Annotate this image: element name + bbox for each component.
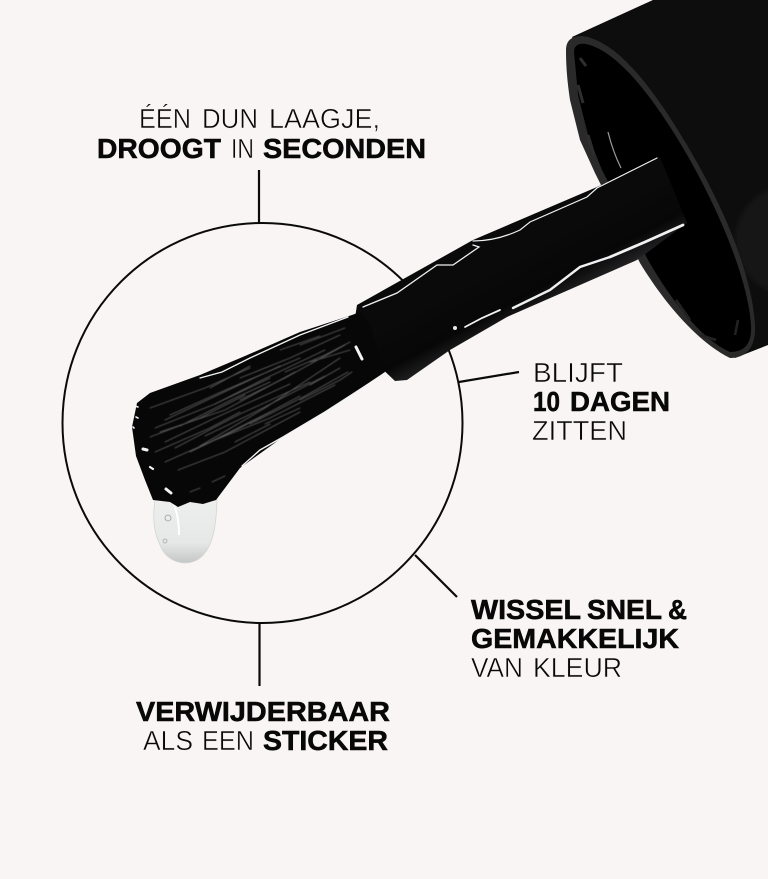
brush body bbox=[132, 312, 385, 507]
circle outline bbox=[62, 223, 462, 623]
label: lower right: VAN bbox=[471, 652, 523, 683]
label: right: 10 bbox=[533, 386, 560, 417]
label: right: DAGEN bbox=[570, 386, 670, 417]
connector: right label bbox=[459, 372, 519, 382]
connector: bottom label bbox=[258, 624, 261, 686]
label: top: LAAGJE, bbox=[269, 103, 380, 134]
label: top: DROOGT bbox=[97, 133, 221, 164]
brush with polish drop bbox=[132, 312, 385, 563]
stem body bbox=[355, 157, 687, 381]
nail polish cap bbox=[566, 0, 768, 358]
label: top: SECONDEN bbox=[263, 133, 426, 164]
polish bottle stem bbox=[355, 157, 687, 381]
label: lower right bbox=[471, 594, 687, 683]
label: top: IN bbox=[231, 133, 254, 164]
bristle strands bbox=[150, 328, 352, 492]
label: lower right: & bbox=[668, 594, 687, 625]
clear drop bbox=[154, 495, 217, 563]
cap opening interior bbox=[574, 44, 751, 352]
cap opening rim bbox=[566, 36, 755, 358]
label: bottom: ALS bbox=[143, 725, 193, 756]
label: right bbox=[532, 357, 670, 446]
label: right: ZITTEN bbox=[532, 415, 627, 446]
connector: top label bbox=[258, 170, 260, 223]
label: top: DUN bbox=[202, 103, 258, 134]
label: bottom: VERWIJDERBAAR bbox=[136, 696, 390, 727]
label: lower right: SNEL bbox=[587, 594, 662, 625]
label: top bbox=[97, 103, 426, 164]
cap body bbox=[572, 0, 768, 358]
label: bottom bbox=[136, 696, 390, 756]
cap inner thread bbox=[578, 58, 594, 155]
connector: lower right label bbox=[415, 555, 457, 597]
label: bottom: STICKER bbox=[263, 725, 388, 756]
stem highlights bbox=[363, 158, 683, 330]
label: lower right: KLEUR bbox=[533, 652, 622, 683]
label: bottom: EEN bbox=[202, 725, 254, 756]
brush highlights bbox=[133, 317, 367, 493]
label: top: ÉÉN bbox=[139, 103, 191, 134]
label: right: BLIJFT bbox=[533, 357, 623, 388]
label: lower right: GEMAKKELIJK bbox=[471, 623, 679, 654]
label: lower right: WISSEL bbox=[471, 594, 581, 625]
drop highlights bbox=[172, 500, 179, 535]
